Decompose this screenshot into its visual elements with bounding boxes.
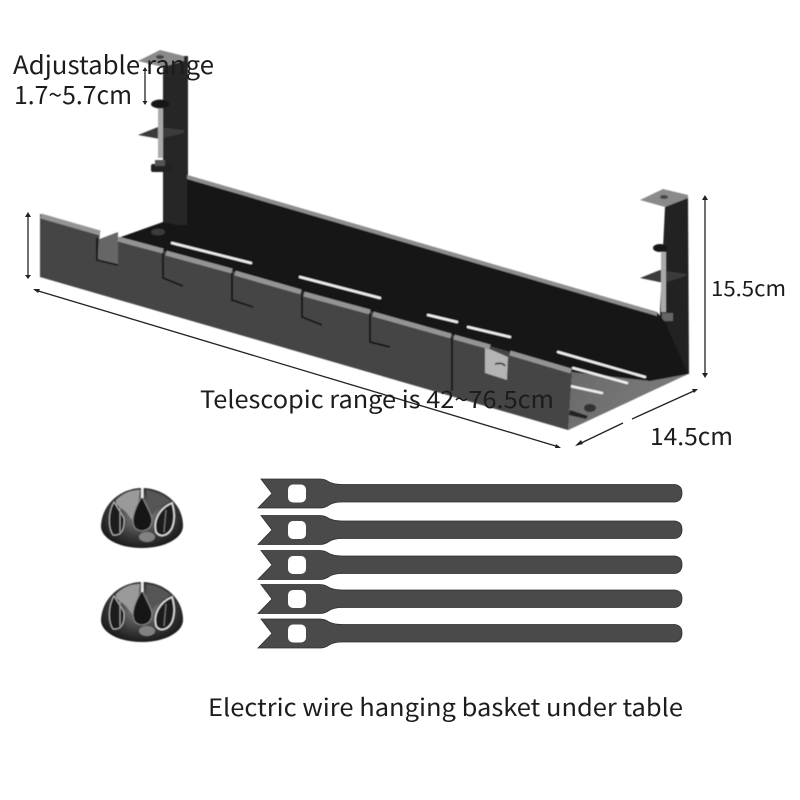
left end notch piece (97, 232, 118, 265)
strap 4 (258, 584, 682, 614)
tray floor (118, 222, 688, 430)
arrow: wall height (25, 212, 31, 279)
arrow: adjustable range (142, 67, 148, 105)
label: telescopic range: Telescopic range is 42~76.5cm (200, 380, 554, 415)
arrow: width (575, 389, 698, 446)
dimension arrows (25, 67, 708, 448)
cable clip bottom (101, 582, 183, 642)
tab cutout (485, 347, 508, 380)
strap 2 (258, 516, 682, 544)
back wall (118, 175, 688, 374)
caption: Electric wire hanging basket under table (208, 688, 683, 723)
velcro straps (258, 479, 682, 648)
strap 3 (258, 550, 682, 580)
arrow: telescopic length (33, 289, 561, 448)
left clamp bracket (138, 50, 188, 228)
right clamp bracket (640, 189, 689, 374)
arrow: total height (702, 195, 708, 378)
label: width: 14.5cm (650, 417, 733, 452)
cable tray illustration (40, 50, 689, 430)
strap 5 (258, 619, 682, 648)
floor slots (172, 243, 645, 393)
strap 1 (258, 479, 682, 508)
cable clip top (101, 488, 183, 548)
front wall (40, 214, 572, 430)
label: adjustable range: Adjustable range (13, 46, 214, 82)
label: height: 15.5cm (711, 273, 786, 303)
label: adjustable range value: 1.7~5.7cm (14, 76, 132, 112)
top flange segments (41, 216, 571, 371)
wall cuts (97, 238, 452, 391)
